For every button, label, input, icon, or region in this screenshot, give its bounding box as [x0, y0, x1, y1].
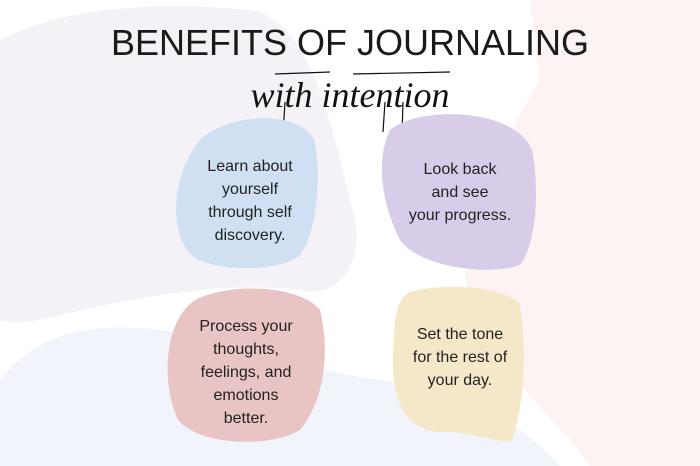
text: blue: Learn about — [207, 158, 293, 175]
text: purple: Look back — [424, 161, 496, 178]
text: pink: feelings, and — [201, 364, 291, 381]
text: pink: better. — [224, 410, 268, 427]
text: pink — [199, 318, 293, 427]
text: yellow — [413, 326, 508, 389]
text: pink: Process your — [199, 318, 293, 335]
text: pink: emotions — [214, 387, 278, 404]
text: blue: through self — [208, 204, 292, 221]
text: yellow: for the rest of — [413, 349, 507, 366]
text: purple: and see — [432, 184, 488, 201]
text: blue: yourself — [222, 181, 278, 198]
text: purple — [409, 161, 511, 224]
text: yellow: your day. — [428, 372, 492, 389]
text: yellow: Set the tone — [417, 326, 503, 343]
title: BENEFITS OF JOURNALING — [111, 22, 589, 63]
text: blue: discovery. — [215, 227, 285, 244]
text: pink: thoughts, — [213, 341, 279, 358]
subtitle script: with intention — [250, 75, 450, 115]
text: purple: your progress. — [409, 207, 511, 224]
text: blue — [207, 158, 293, 244]
